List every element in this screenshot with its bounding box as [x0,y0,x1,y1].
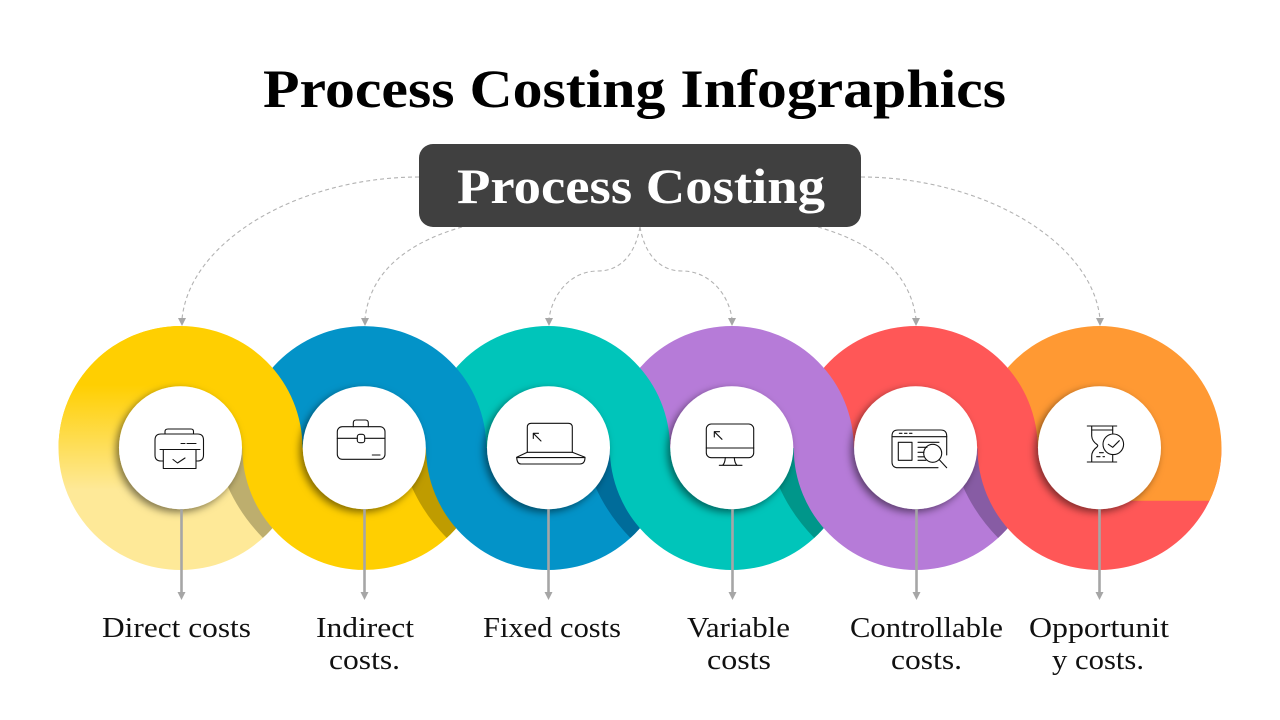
label: Variable costs [687,612,790,676]
label: Fixed costs: Fixed costs [483,612,621,644]
label: Controllable costs. [850,612,1003,676]
central box: Process Costing [419,144,861,227]
ribbon: interlocking coloured rings [58,326,1222,570]
label: Variable costs: Variable [687,612,790,644]
icon: hourglass with check [1087,426,1124,462]
central box: Process Costing: Process Costing [457,158,825,214]
title: Process Costing Infographics [263,59,1006,119]
label: Controllable costs.: Controllable [850,612,1003,644]
icon: briefcase [337,420,385,459]
icon: browser with magnifier [892,430,947,468]
icon: printer [155,429,204,468]
icon: laptop [517,423,585,464]
label: Indirect costs.: costs. [329,644,400,676]
label: Opportunity costs.: Opportunit [1029,612,1169,644]
downward arrows to labels [178,509,1104,600]
label: Indirect costs.: Indirect [316,612,414,644]
white icon discs [119,386,1161,509]
label: Indirect costs. [316,612,414,676]
label: Controllable costs.: costs. [891,644,962,676]
label: Opportunity costs.: y costs. [1052,644,1144,676]
label: Direct costs: Direct costs [102,612,251,644]
dashed connectors from the central box to each ring [178,177,1104,326]
icon: desktop monitor [706,424,754,465]
label: Variable costs: costs [707,644,771,676]
label: Opportunity costs. [1029,612,1169,676]
